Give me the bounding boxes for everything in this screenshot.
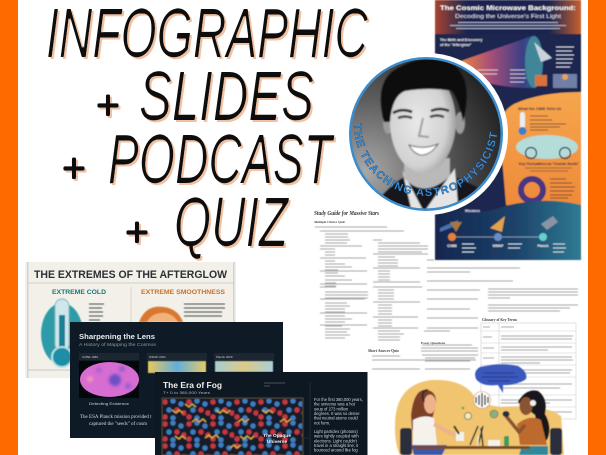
particle plasma image [162,398,303,455]
title: PODCAST [108,120,335,198]
body text: not form. [314,420,330,425]
slide: sharpening the lens: Detecting Existence [89,401,130,406]
infographic poster [435,0,581,260]
study guide document [308,208,586,419]
section: key missions timeline: COBE [447,244,458,248]
slide: sharpening the lens: The ESA Planck mission provided t [80,415,152,420]
yellow backdrop [395,380,564,455]
body text: bounced around like fog [314,448,358,453]
body text: electrons. Light couldn't [314,438,358,443]
portrait [380,60,478,208]
section: birth and discovery: of the "Afterglow" [440,43,472,47]
title: + [125,208,149,255]
chairs [400,428,412,455]
icons: small floating badges [462,407,498,420]
icon: frozen thermometer [41,299,83,367]
WMAP map [148,361,206,373]
title: + [96,81,120,128]
slide: the extremes of the afterglow: EXTREME SMOOTHNESS [141,289,226,296]
title: + [62,144,86,191]
quiz text lines [315,227,578,369]
slide: sharpening the lens: Sharpening the Lens [79,332,155,341]
slide: sharpening the lens: captured the "seeds" of cosm [89,422,147,427]
essay questions heading: Essay Questions [421,341,446,345]
study guide heading: Study Guide for Massive Stars [314,210,379,217]
section: key missions timeline: Planck [538,244,549,248]
left orange band [0,0,18,455]
glossary table: Glossary of Key Terms [482,318,518,322]
body text: degrees. It was so dense [314,411,360,416]
section: what the CMB tells us: Key Fluctuations as "Cosmic Seeds" [519,162,579,166]
profile badge: The Teaching Astrophysicist [349,53,508,215]
Planck map [215,361,273,372]
slide: the era of fog: The Era of Fog [163,381,222,390]
icon: sun sphere [139,307,183,322]
section: what the CMB tells us: What the CMB Tells Us [518,106,562,111]
section: key missions timeline [435,200,581,260]
slide: the extremes of the afterglow: THE EXTREMES OF THE AFTERGLOW [34,269,228,281]
multiple choice heading: Multiple Choice Quiz [313,220,346,224]
section: key missions timeline: Missions [465,209,480,213]
title: SLIDES [139,57,314,135]
COBE map [79,361,139,398]
podcast illustration [395,364,564,455]
slide: the extremes of the afterglow: EXTREME COLD [52,289,106,296]
glossary table [481,318,576,419]
icon: microphone waveform [474,392,490,408]
slide: the era of fog: T+ 0 to 380,000 Years [163,390,210,395]
body text: For the first 380,000 years, [314,397,363,402]
table and props [413,426,530,449]
poster header [435,0,581,34]
section: key missions timeline: WMAP [493,244,504,248]
slide: sharpening the lens: COBE 1989 [82,355,98,359]
title: QUIZ [174,183,290,261]
title [46,0,368,261]
short answer heading: Short Answer Quiz [368,349,399,353]
poster header: The Cosmic Microwave Background: [440,5,576,12]
body text: the universe was a hot [314,402,356,407]
slide: the era of fog: Universe [267,439,287,445]
slide: sharpening the lens: Planck 2009 [216,355,233,359]
slide: sharpening the lens [70,322,283,438]
body text: soup of 273 million [314,406,349,411]
section: birth and discovery [440,36,577,88]
section: what the CMB tells us [500,92,581,206]
speech bubble [475,364,526,393]
slide: the era of fog: The Opaque [263,433,291,439]
poster header: Decoding the Universe's First Light [455,14,562,20]
left woman [411,390,464,455]
badge caption: THE TEACHING ASTROPHYSICIST [354,123,498,196]
slide: the era of fog [155,372,368,455]
section: birth and discovery: The Birth and Discovery [440,38,483,42]
right orange band [588,0,606,455]
body text: were tightly coupled with [314,434,359,439]
body text: travel in a straight line; it [314,443,359,448]
right woman [502,390,549,455]
slide: the extremes of the afterglow [25,262,236,378]
body text: Light particles (photons) [314,429,358,434]
body text: that neutral atoms could [314,416,358,421]
slide: sharpening the lens: WMAP 2001 [149,355,166,359]
body text [314,397,363,453]
slide: sharpening the lens: A History of Mapping the Cosmos [79,342,157,347]
